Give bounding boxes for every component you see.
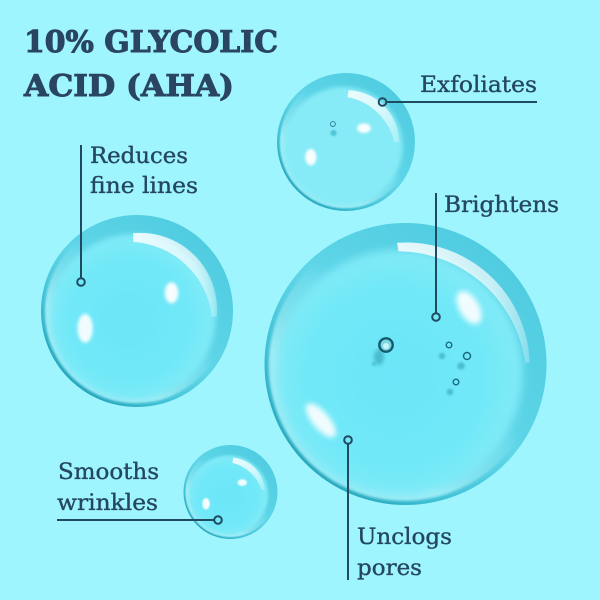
label: exfoliates [379,72,537,106]
droplet: brightens and unclogs pores [264,223,546,505]
title [23,25,278,104]
droplet: smooths wrinkles [184,445,278,539]
label: exfoliates: Exfoliates [420,72,537,98]
air bubbles [372,338,470,395]
label: unclogs pores [344,436,452,581]
label: reduces fine lines: fine lines [90,173,198,199]
label: brightens: Brightens [444,192,559,218]
title: 10% GLYCOLIC [24,25,278,60]
droplet: reduces fine lines [41,215,233,407]
label: unclogs pores: Unclogs [357,524,452,550]
label: brightens [432,192,559,321]
label: smooths wrinkles [57,459,222,524]
label: smooths wrinkles: wrinkles [57,490,158,516]
label: reduces fine lines: Reduces [90,143,188,169]
label: reduces fine lines [77,143,198,286]
label: smooths wrinkles: Smooths [58,459,159,485]
droplet: exfoliates [277,73,415,211]
title: ACID (AHA) [23,69,234,104]
label: unclogs pores: pores [357,555,422,581]
